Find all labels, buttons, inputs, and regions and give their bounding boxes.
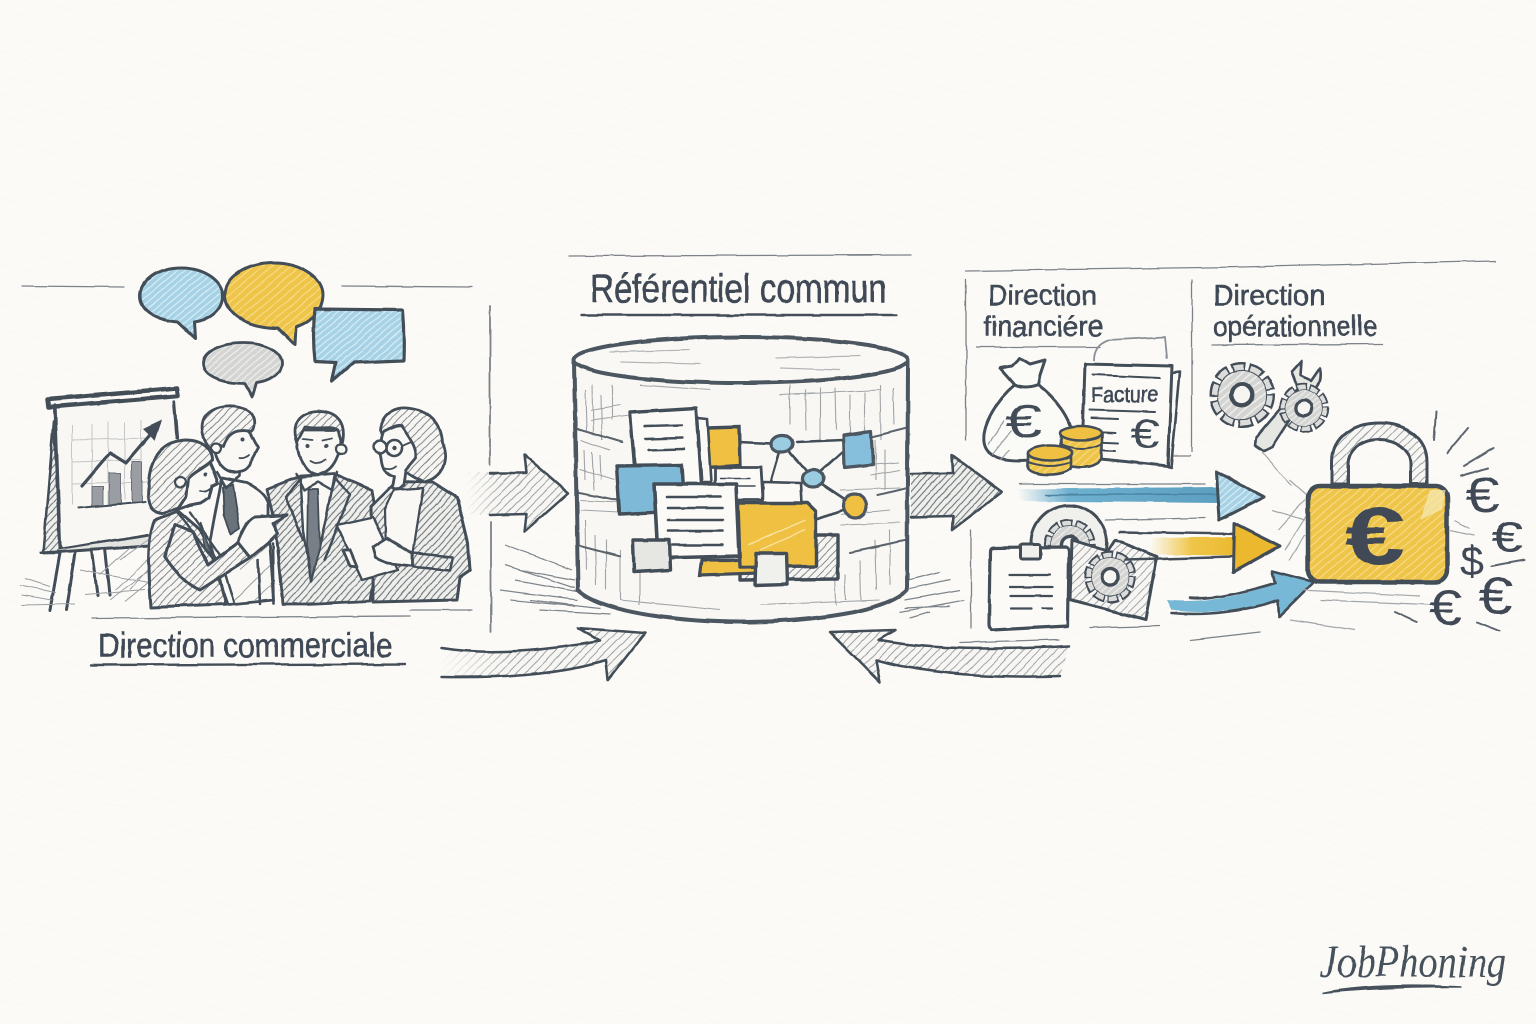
- network nodes: [771, 431, 873, 518]
- network links: [738, 440, 855, 520]
- heading: référentiel commun: Référentiel commun: [590, 267, 887, 311]
- heading: direction financière: financiére: [983, 311, 1103, 343]
- database cylinder: [574, 337, 908, 622]
- heading: direction opérationnelle: [1212, 280, 1383, 345]
- arrow: bottom left curved: [440, 628, 645, 680]
- floor hatching: [20, 535, 160, 605]
- arrow: yellow straight: [1120, 523, 1280, 572]
- small yellow folder: [707, 427, 740, 467]
- icon: invoice: [1082, 337, 1180, 468]
- heading: direction financière: Direction: [988, 280, 1097, 312]
- panel: référentiel commun: [500, 255, 965, 622]
- icon: padlock with euro: [1308, 423, 1447, 582]
- chart grid: [72, 420, 150, 505]
- currency symbols: [1429, 467, 1523, 636]
- person: woman with glasses and paper: [337, 408, 470, 602]
- person: man in suit: [267, 411, 380, 604]
- panel rules: [22, 286, 491, 632]
- icon: money bag: €: [1006, 395, 1042, 447]
- icon: clipboard and gears: [989, 505, 1157, 630]
- blue folder: [617, 465, 685, 514]
- heading: direction opérationnelle: opérationnelle: [1213, 311, 1377, 343]
- legs: [50, 549, 110, 610]
- small grey square: [633, 540, 670, 572]
- heading: direction opérationnelle: Direction: [1213, 280, 1325, 312]
- documents behind: [715, 467, 802, 505]
- currency symbols: €: [1491, 513, 1523, 562]
- icon: money bag: [984, 358, 1072, 460]
- panel: directions finance and operations: [960, 261, 1525, 643]
- cylinder bands: [575, 428, 907, 556]
- logo: JobPhoning: JobPhoning: [1320, 936, 1506, 987]
- speech bubble: yellow: [225, 263, 323, 345]
- icon: padlock with euro: €: [1345, 491, 1405, 582]
- speech bubble: blue: [140, 268, 223, 338]
- flipchart with chart: [41, 388, 178, 610]
- icon: gears and wrench: [1217, 361, 1323, 451]
- base hatching around database: [500, 545, 965, 618]
- trend arrow: [82, 429, 155, 486]
- shine marks: [1395, 412, 1525, 631]
- heading: direction commerciale: Direction commerciale: [98, 627, 392, 665]
- small white square: [755, 553, 787, 585]
- artwork: [20, 255, 1525, 993]
- paper and hands: [337, 517, 398, 580]
- document: top left: [630, 408, 711, 484]
- cylinder outline: [574, 362, 908, 622]
- currency symbols: €: [1465, 467, 1499, 523]
- icon: coins: [1028, 426, 1102, 475]
- arrow: bottom right curved: [830, 630, 1072, 682]
- arrow: blue curved: [1167, 571, 1314, 617]
- grey hatched folder: [740, 535, 838, 580]
- icon: invoice: Facture: [1091, 384, 1158, 407]
- person: man in shirt: [202, 406, 274, 605]
- icon: invoice: €: [1130, 412, 1160, 456]
- speech bubbles: [140, 263, 404, 397]
- impact hatching around lock: [1262, 452, 1475, 630]
- person: woman pointing: [148, 440, 287, 607]
- heading: direction financière: [976, 280, 1103, 347]
- cylinder hatch: [580, 385, 900, 610]
- document: centre: [654, 484, 739, 558]
- currency symbols: €: [1478, 568, 1513, 624]
- currency symbols: $: [1460, 537, 1484, 584]
- panel rules: [960, 261, 1495, 643]
- yellow folder: [700, 503, 816, 575]
- panel: direction commerciale: [20, 263, 491, 665]
- bars: [92, 487, 103, 506]
- arrow: repository to directions: [911, 455, 1002, 530]
- speech bubble: grey: [203, 343, 282, 397]
- speech bubble: rectangle: [314, 309, 404, 381]
- currency symbols: €: [1429, 580, 1462, 636]
- arrow: commercial to repository: [466, 455, 568, 532]
- arrow: blue straight: [1018, 472, 1264, 520]
